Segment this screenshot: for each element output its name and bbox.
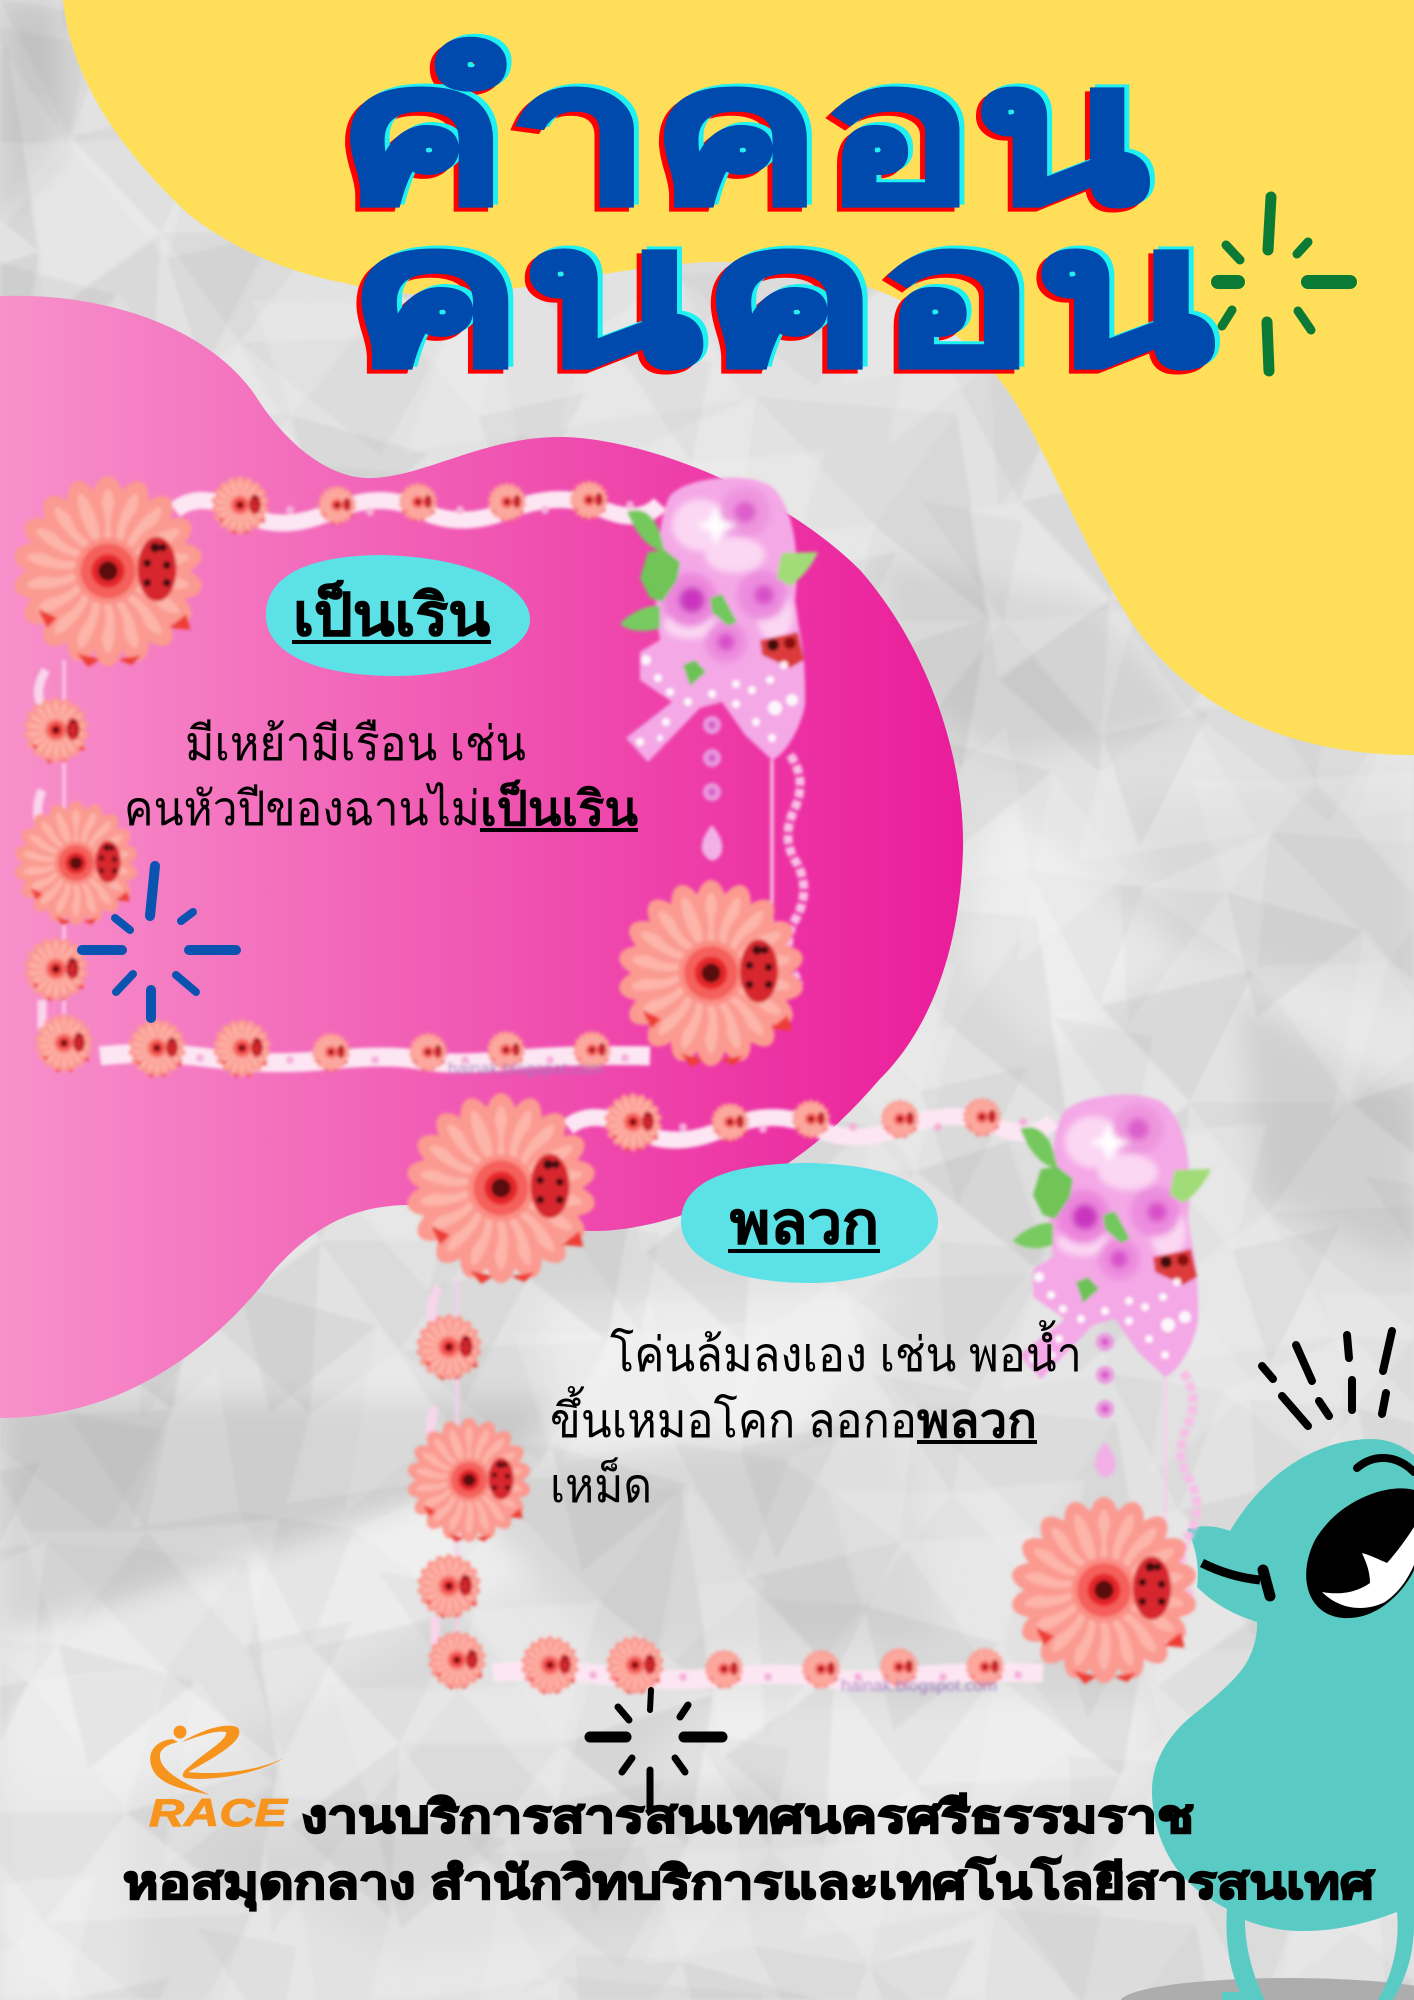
text block: พลวก definition: เหม็ด [550, 1457, 652, 1513]
title: คนคอน [348, 187, 1214, 406]
title: คนคอน [343, 191, 1209, 410]
heading badge: เป็นเริน [266, 555, 530, 676]
pink blob [0, 296, 963, 1418]
panel: frame 1 [11, 476, 818, 1078]
icon: black exclamation ticks [1262, 1331, 1392, 1426]
logo: RACE [149, 1726, 288, 1835]
brow [1357, 1458, 1414, 1472]
eye [1306, 1488, 1414, 1618]
logo: RACE: RACE [149, 1792, 288, 1835]
icon: green starburst [1218, 197, 1350, 371]
yellow blob [63, 0, 1414, 755]
illustration: teal creature [1152, 1439, 1414, 2000]
icon: black starburst [590, 1690, 722, 1808]
heading badge: พลวก [681, 1163, 938, 1283]
icon: blue starburst [82, 866, 236, 1018]
title: คำคอน [337, 25, 1149, 244]
footer text: หอสมุดกลาง สำนักวิทบริการและเทศโนโลยีสารสนเทศ [123, 1856, 1376, 1911]
title: คำคอน [332, 29, 1144, 248]
title [332, 22, 1219, 410]
footer text [123, 1791, 1376, 1911]
text block: พลวก definition: พลวก [917, 1395, 1037, 1448]
panel: frame 2 [404, 1093, 1211, 1695]
footer text: งานบริการสารสนเทศนครศรีธรรมราช [301, 1791, 1194, 1842]
mouth [1202, 1563, 1260, 1580]
text block: พลวก definition: ขึ้นเหมอโคก ลอกอ [550, 1386, 917, 1448]
text block: เป็นเริน definition: เป็นเริน [480, 779, 638, 836]
title: คำคอน [342, 22, 1154, 241]
text block: พลวก definition [550, 1320, 1082, 1513]
text block: พลวก definition: โค่นล้มลงเอง เช่น พอน้ำ [610, 1320, 1082, 1382]
text block: เป็นเริน definition [124, 718, 638, 836]
heading badge: พลวก: พลวก [730, 1191, 879, 1256]
text block: เป็นเริน definition: มีเหย้ามีเรือน เช่น [185, 718, 526, 771]
heading badge: เป็นเริน: เป็นเริน [293, 580, 490, 648]
text block: เป็นเริน definition: คนหัวปีของฉานไม่ [124, 781, 480, 836]
title: คนคอน [353, 184, 1219, 403]
